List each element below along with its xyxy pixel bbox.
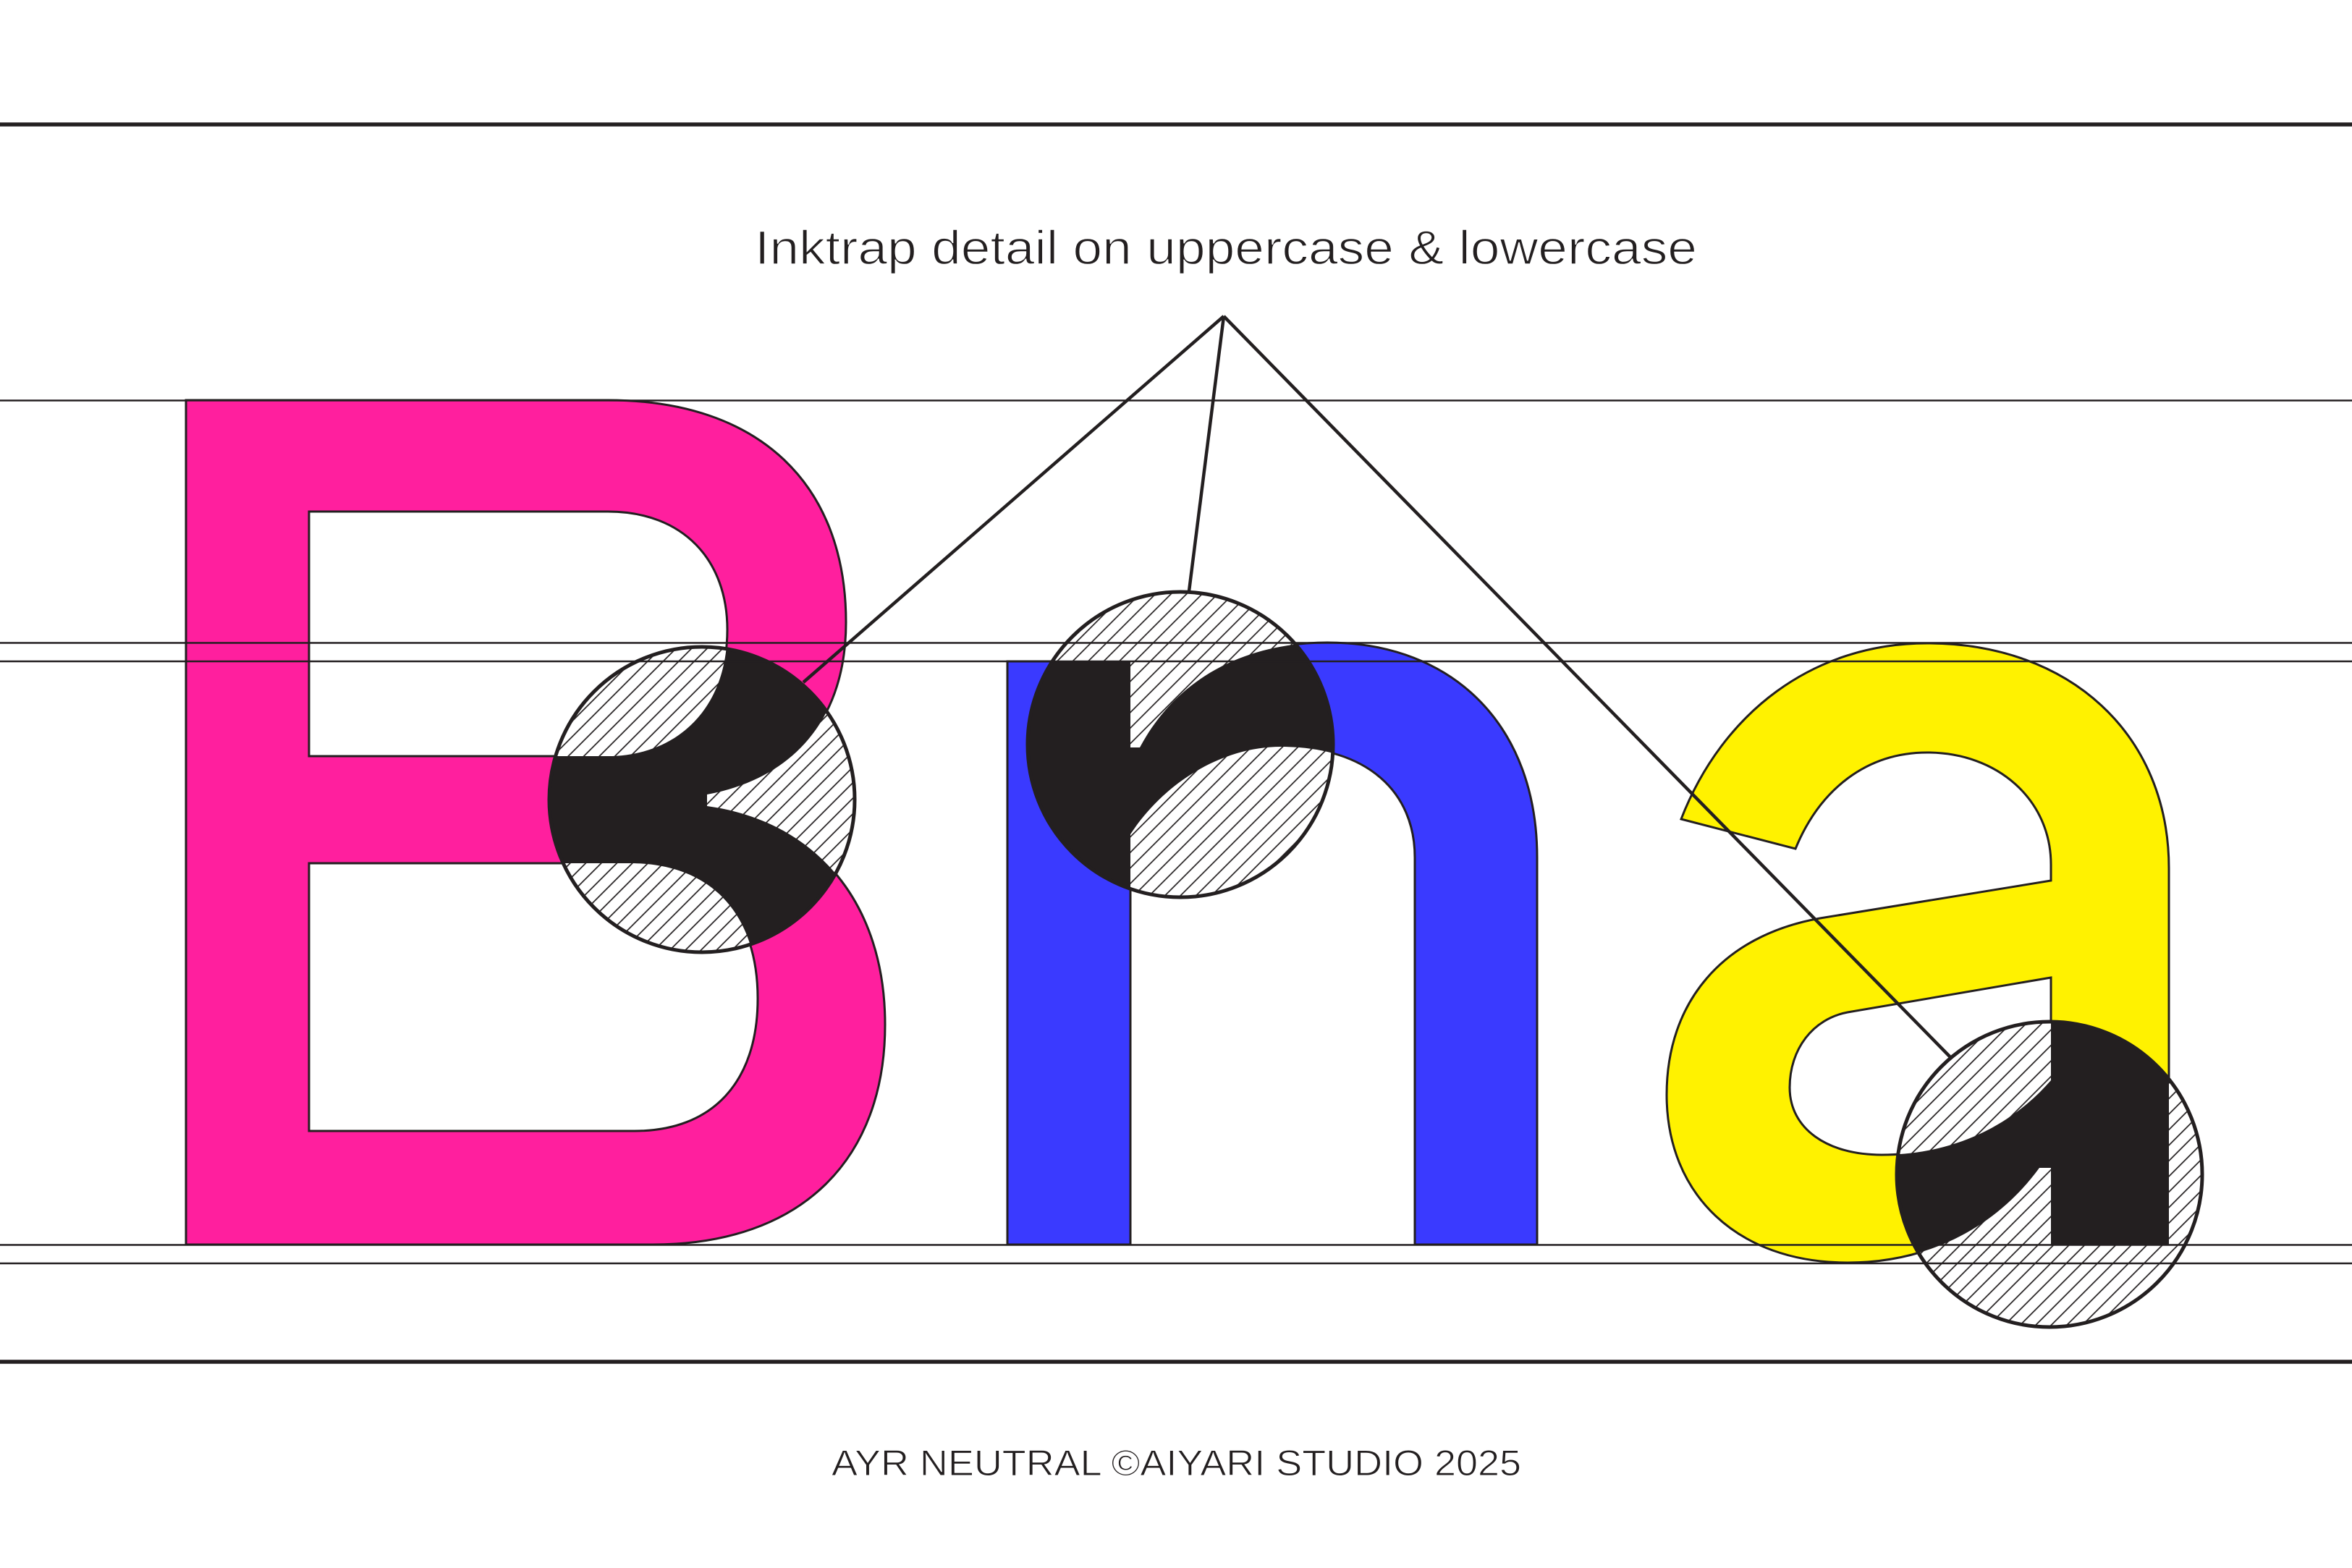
heading: Inktrap detail on uppercase & lowercase (755, 221, 1697, 274)
letterform: yellow lowercase a (1667, 643, 2169, 1263)
footer credit: AYR NEUTRAL ©AIYARI STUDIO 2025 (832, 1443, 1521, 1483)
magnifier: inktrap detail on a (1895, 1020, 2204, 1328)
letterform: pink uppercase B (186, 400, 885, 1245)
letterform: blue lowercase n (1007, 643, 1537, 1245)
magnifier: inktrap detail on n (1026, 590, 1334, 899)
magnifier: inktrap detail on B (547, 645, 857, 954)
callout arrows: leader lines from heading to the three details (803, 316, 1950, 1057)
